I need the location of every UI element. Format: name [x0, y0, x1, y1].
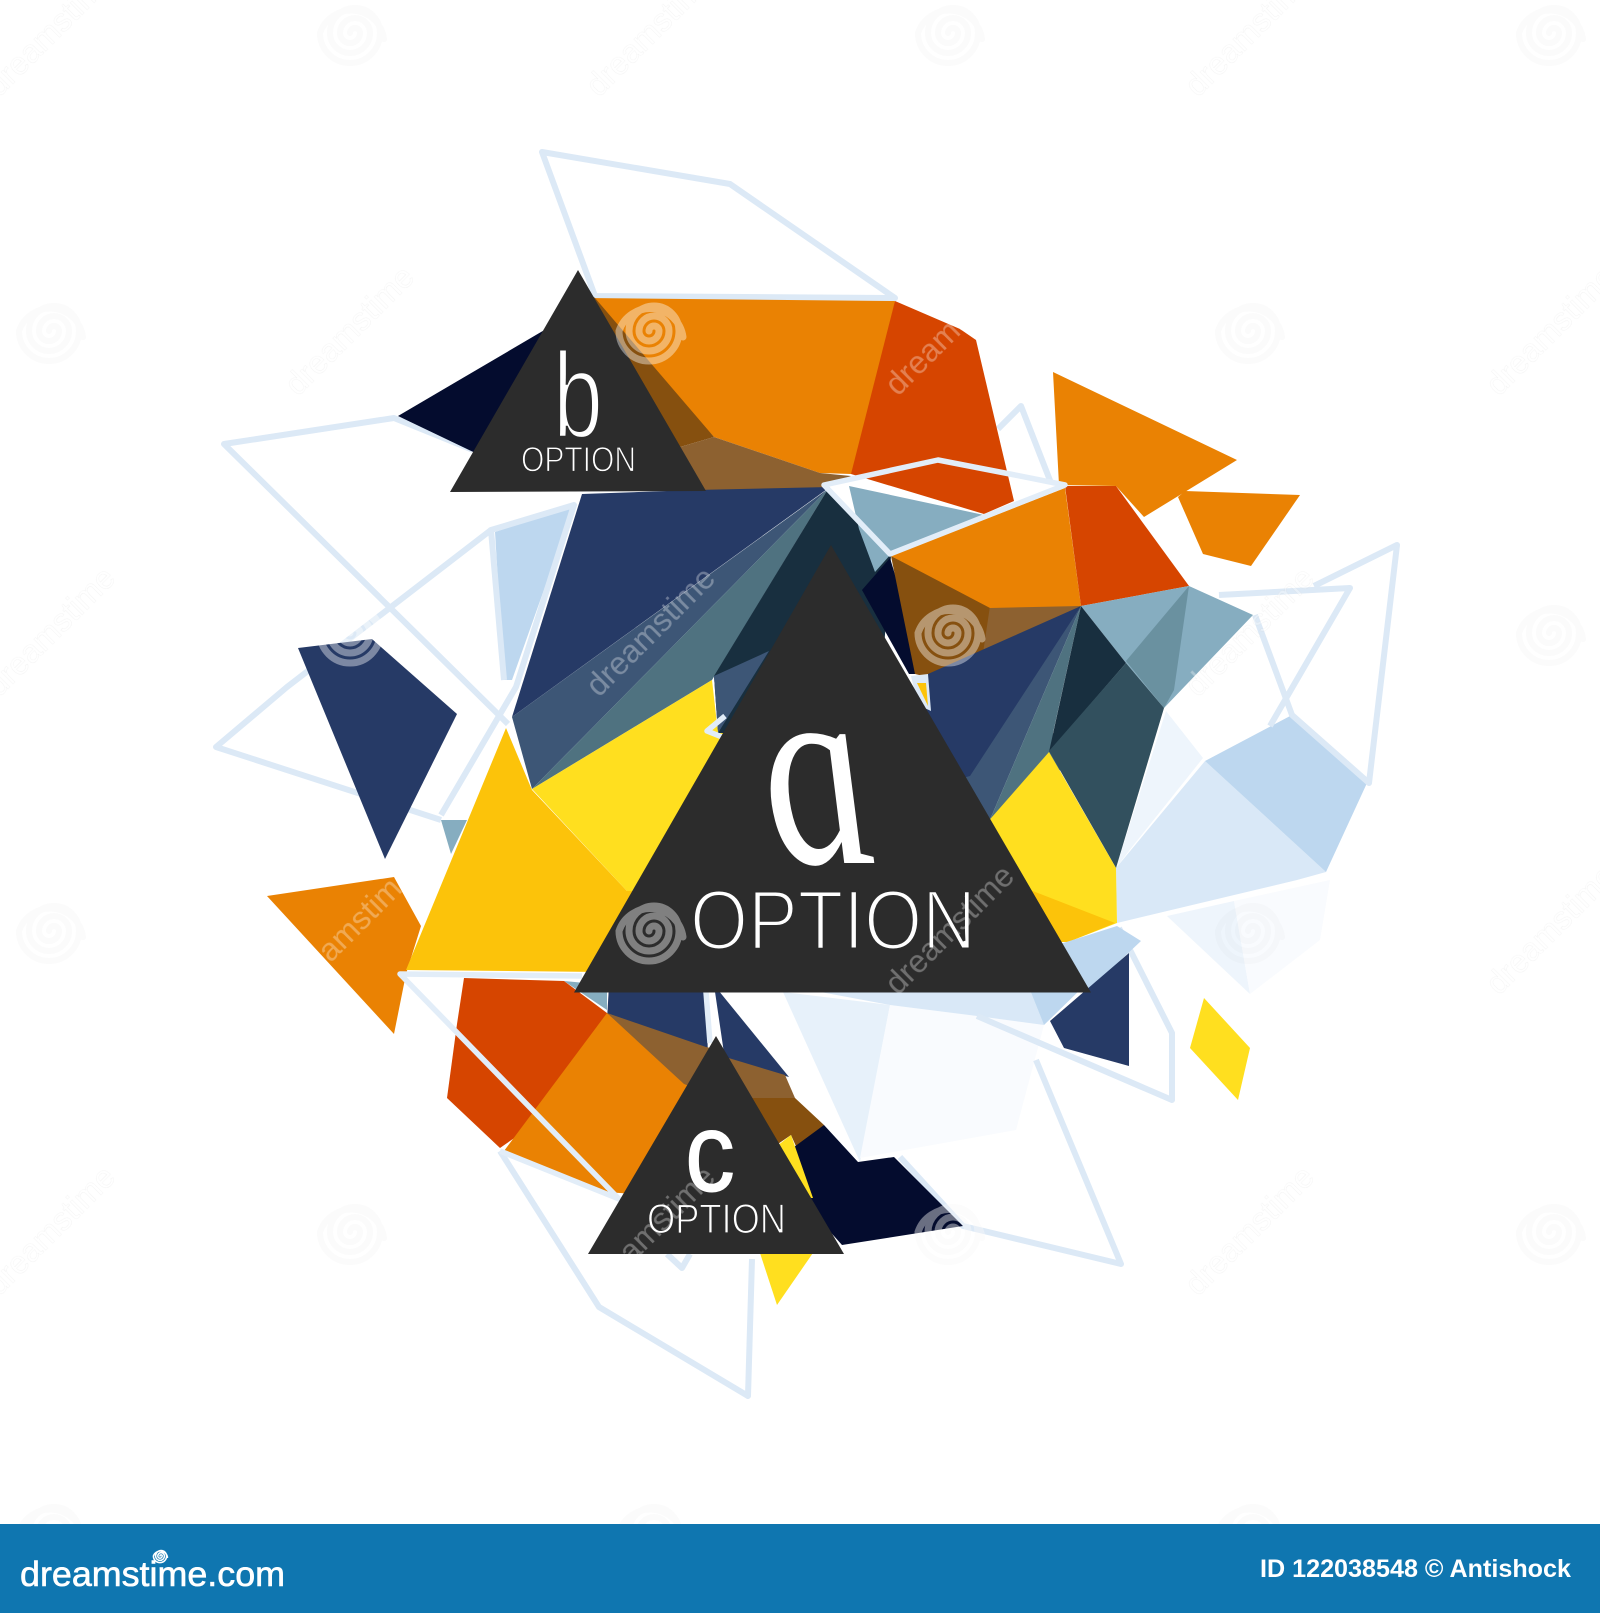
letter b: b — [553, 327, 603, 463]
watermark text: dreamstime — [877, 258, 1021, 402]
option b triangle — [450, 270, 706, 492]
watermark text: dreamstime — [1177, 559, 1321, 703]
option a label: OPTION — [690, 873, 976, 967]
watermark text: dreamstime — [277, 258, 421, 402]
watermark text: dreamstime — [277, 857, 421, 1001]
option c label: OPTION — [647, 1195, 786, 1242]
panel: right faceted cluster — [891, 486, 1253, 942]
panel: left floating shapes — [267, 639, 457, 1034]
footer bar — [0, 1524, 1600, 1613]
option b label: OPTION — [521, 440, 636, 480]
footer brand: dreamstime.com — [20, 1555, 285, 1594]
footer image id and credit: ID 122038548 © Antishock — [1260, 1555, 1571, 1583]
pale background facets — [441, 505, 1367, 1162]
panel: lower orange cluster — [447, 978, 963, 1305]
watermark text: dreamstime — [578, 559, 722, 703]
foreground wireframe outlines — [400, 460, 1065, 1199]
watermark text: dreamstime — [578, 1158, 722, 1302]
panel: top orange cluster — [398, 290, 1014, 514]
watermark text: dreamstime — [877, 857, 1021, 1001]
panel: yellow facets — [406, 680, 740, 972]
letter a: a — [714, 617, 904, 923]
light wireframe outlines behind shapes — [216, 152, 1397, 1396]
option a triangle — [574, 545, 1091, 992]
panel: central navy fan — [512, 486, 984, 789]
panel: upper right floating shapes — [1053, 372, 1300, 566]
watermark text: dreamstime — [1177, 1158, 1321, 1302]
icon: footer spiral — [153, 1551, 167, 1563]
option c triangle — [588, 1036, 844, 1254]
letter c: c — [685, 1090, 735, 1215]
panel: lower right shapes — [1028, 926, 1250, 1100]
